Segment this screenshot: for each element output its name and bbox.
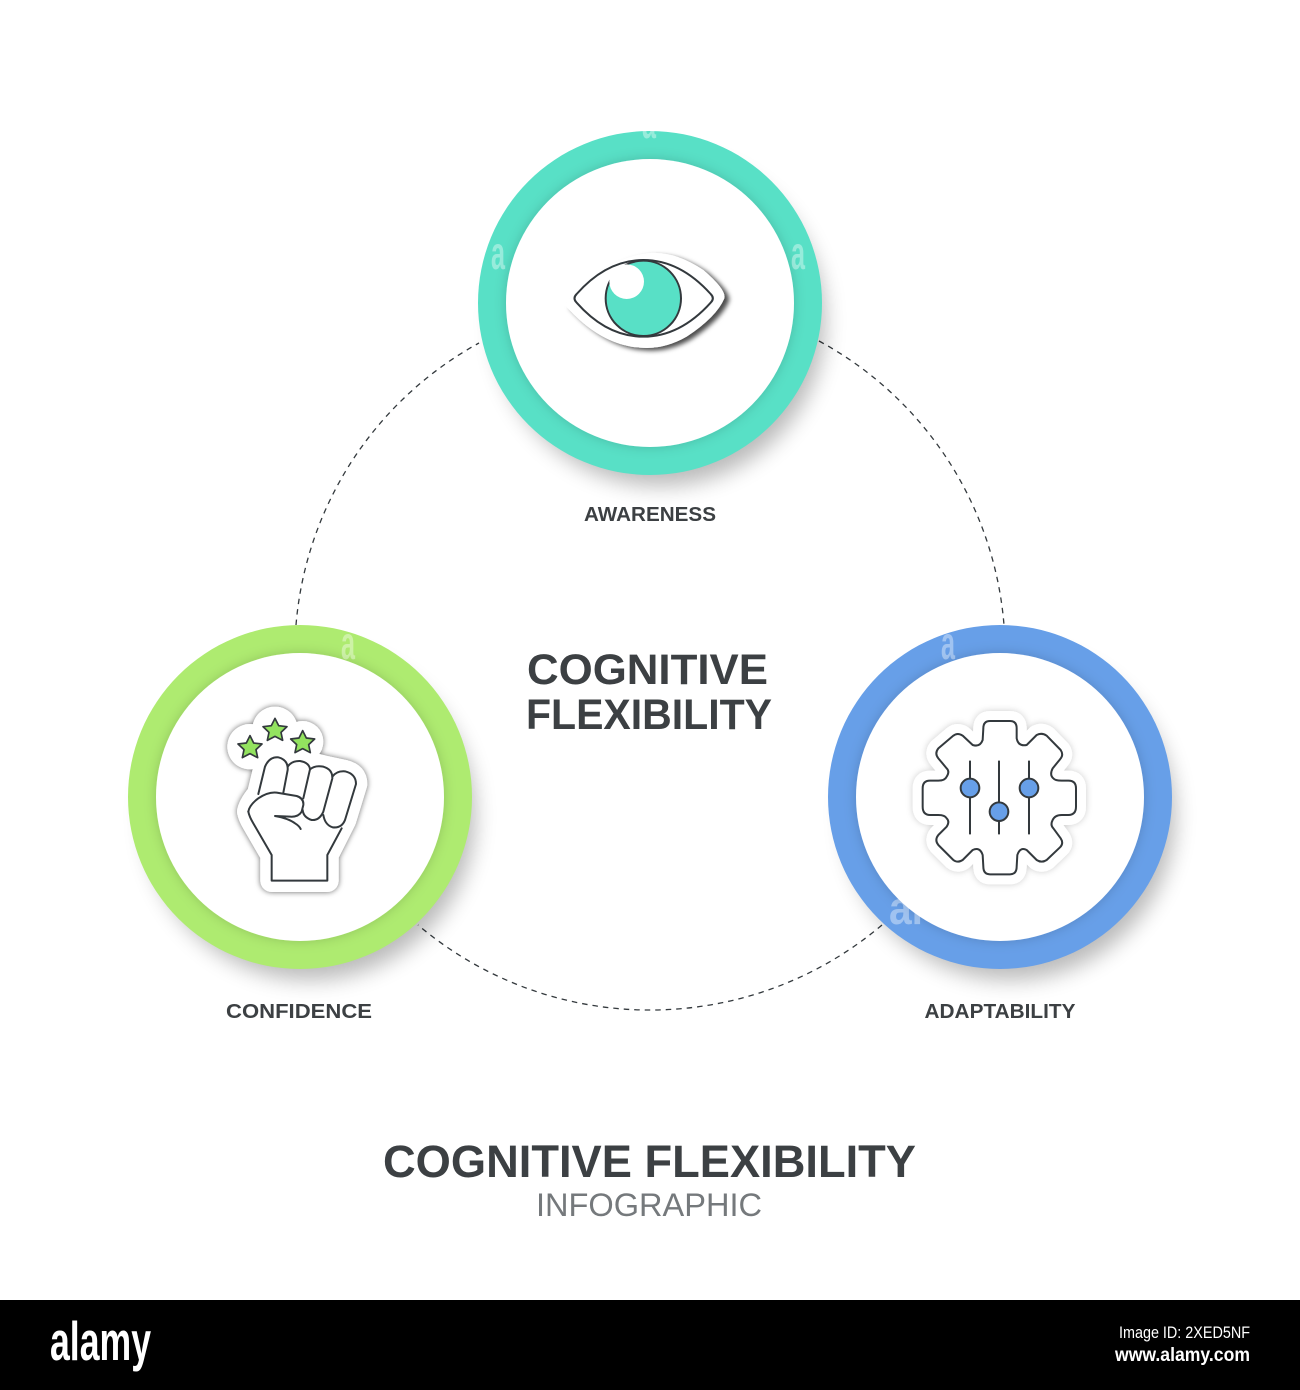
- ring shadow: awareness: [495, 156, 825, 486]
- node: awareness: [478, 131, 825, 526]
- watermark letters on rings: a: [941, 617, 955, 669]
- ring interior: awareness: [506, 159, 794, 447]
- label: awareness: AWARENESS: [584, 504, 716, 526]
- footer website: www.alamy.com: [1114, 1345, 1250, 1366]
- label: confidence: CONFIDENCE: [226, 1001, 372, 1023]
- icon: stars: [238, 718, 315, 758]
- ring: confidence: [128, 625, 472, 969]
- node: adaptability: [828, 625, 1175, 1023]
- ring interior: adaptability: [856, 653, 1144, 941]
- dashed connector: awareness to adaptability: [819, 341, 1004, 625]
- footer logo: alamy: [50, 1310, 151, 1372]
- watermark letters on rings: a: [642, 96, 656, 148]
- bottom title: INFOGRAPHIC: [536, 1187, 762, 1223]
- center heading: [526, 646, 772, 739]
- bottom title: [383, 1136, 916, 1223]
- center heading: COGNITIVE: [527, 646, 768, 694]
- footer image id: Image ID: 2XED5NF: [1119, 1323, 1250, 1342]
- watermark letters on rings: a: [341, 617, 355, 669]
- footer bar: [0, 1300, 1300, 1390]
- ring interior: confidence: [156, 653, 444, 941]
- dashed connector: confidence to awareness: [296, 343, 479, 625]
- dashed connector: adaptability to confidence: [418, 925, 882, 1010]
- icon: gear with sliders: [923, 721, 1076, 874]
- ring: awareness: [478, 131, 822, 475]
- node: confidence: [128, 625, 475, 1023]
- watermark letters on rings: [341, 96, 955, 934]
- watermark letters on rings: a: [491, 227, 505, 279]
- ring shadow: confidence: [145, 650, 475, 980]
- ring: adaptability: [828, 625, 1172, 969]
- bottom title: COGNITIVE FLEXIBILITY: [383, 1136, 916, 1187]
- label: adaptability: ADAPTABILITY: [924, 1001, 1076, 1023]
- icon: eye: [565, 253, 725, 348]
- icon: fist with stars: [227, 707, 356, 881]
- center heading: FLEXIBILITY: [526, 691, 772, 739]
- watermark letters on rings: al: [889, 882, 923, 934]
- watermark letters on rings: a: [791, 227, 805, 279]
- ring shadow: adaptability: [845, 650, 1175, 980]
